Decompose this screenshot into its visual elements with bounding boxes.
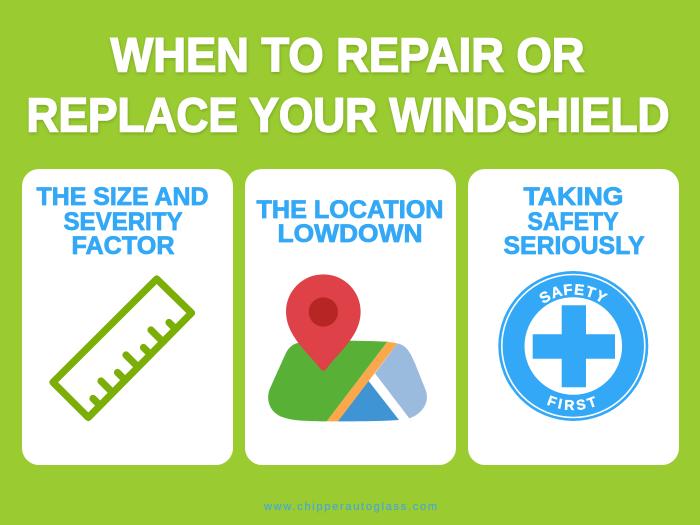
- badge text: safety: SAFETY: [540, 284, 608, 303]
- heading: size and severity: [36, 183, 208, 260]
- heading: taking safety seriously: SAFETY: [528, 208, 619, 236]
- pin centre: [309, 297, 338, 327]
- panel: taking safety seriously: [468, 169, 679, 465]
- map: green area: [268, 341, 387, 421]
- map: blue area: [337, 381, 399, 421]
- heading: taking safety seriously: [504, 183, 645, 260]
- heading: taking safety seriously: SERIOUSLY: [504, 232, 645, 260]
- heading: size and severity: FACTOR: [72, 232, 174, 260]
- footer url: www.chipperautoglass.com: [263, 501, 437, 513]
- heading: size and severity: SEVERITY: [64, 208, 183, 236]
- heading: location lowdown: THE LOCATION: [256, 196, 444, 224]
- map: orange road: [327, 342, 397, 421]
- heading: location lowdown: [256, 196, 444, 248]
- icon: location pin: [286, 274, 361, 371]
- map: light blue area: [375, 343, 427, 418]
- badge text: first: FIRST: [547, 395, 595, 410]
- icon: ruler: [53, 279, 192, 418]
- icon: map with pin: [268, 274, 427, 421]
- heading: location lowdown: LOWDOWN: [278, 220, 422, 248]
- title: WHEN TO REPAIR OR: [110, 30, 584, 82]
- heading: size and severity: THE SIZE AND: [36, 183, 208, 211]
- heading: taking safety seriously: TAKING: [524, 183, 624, 211]
- panel: location lowdown: [245, 169, 456, 465]
- cross: [533, 305, 615, 387]
- title: [26, 30, 670, 142]
- icon: safety first badge: [498, 271, 648, 421]
- panel: size and severity: [22, 169, 233, 465]
